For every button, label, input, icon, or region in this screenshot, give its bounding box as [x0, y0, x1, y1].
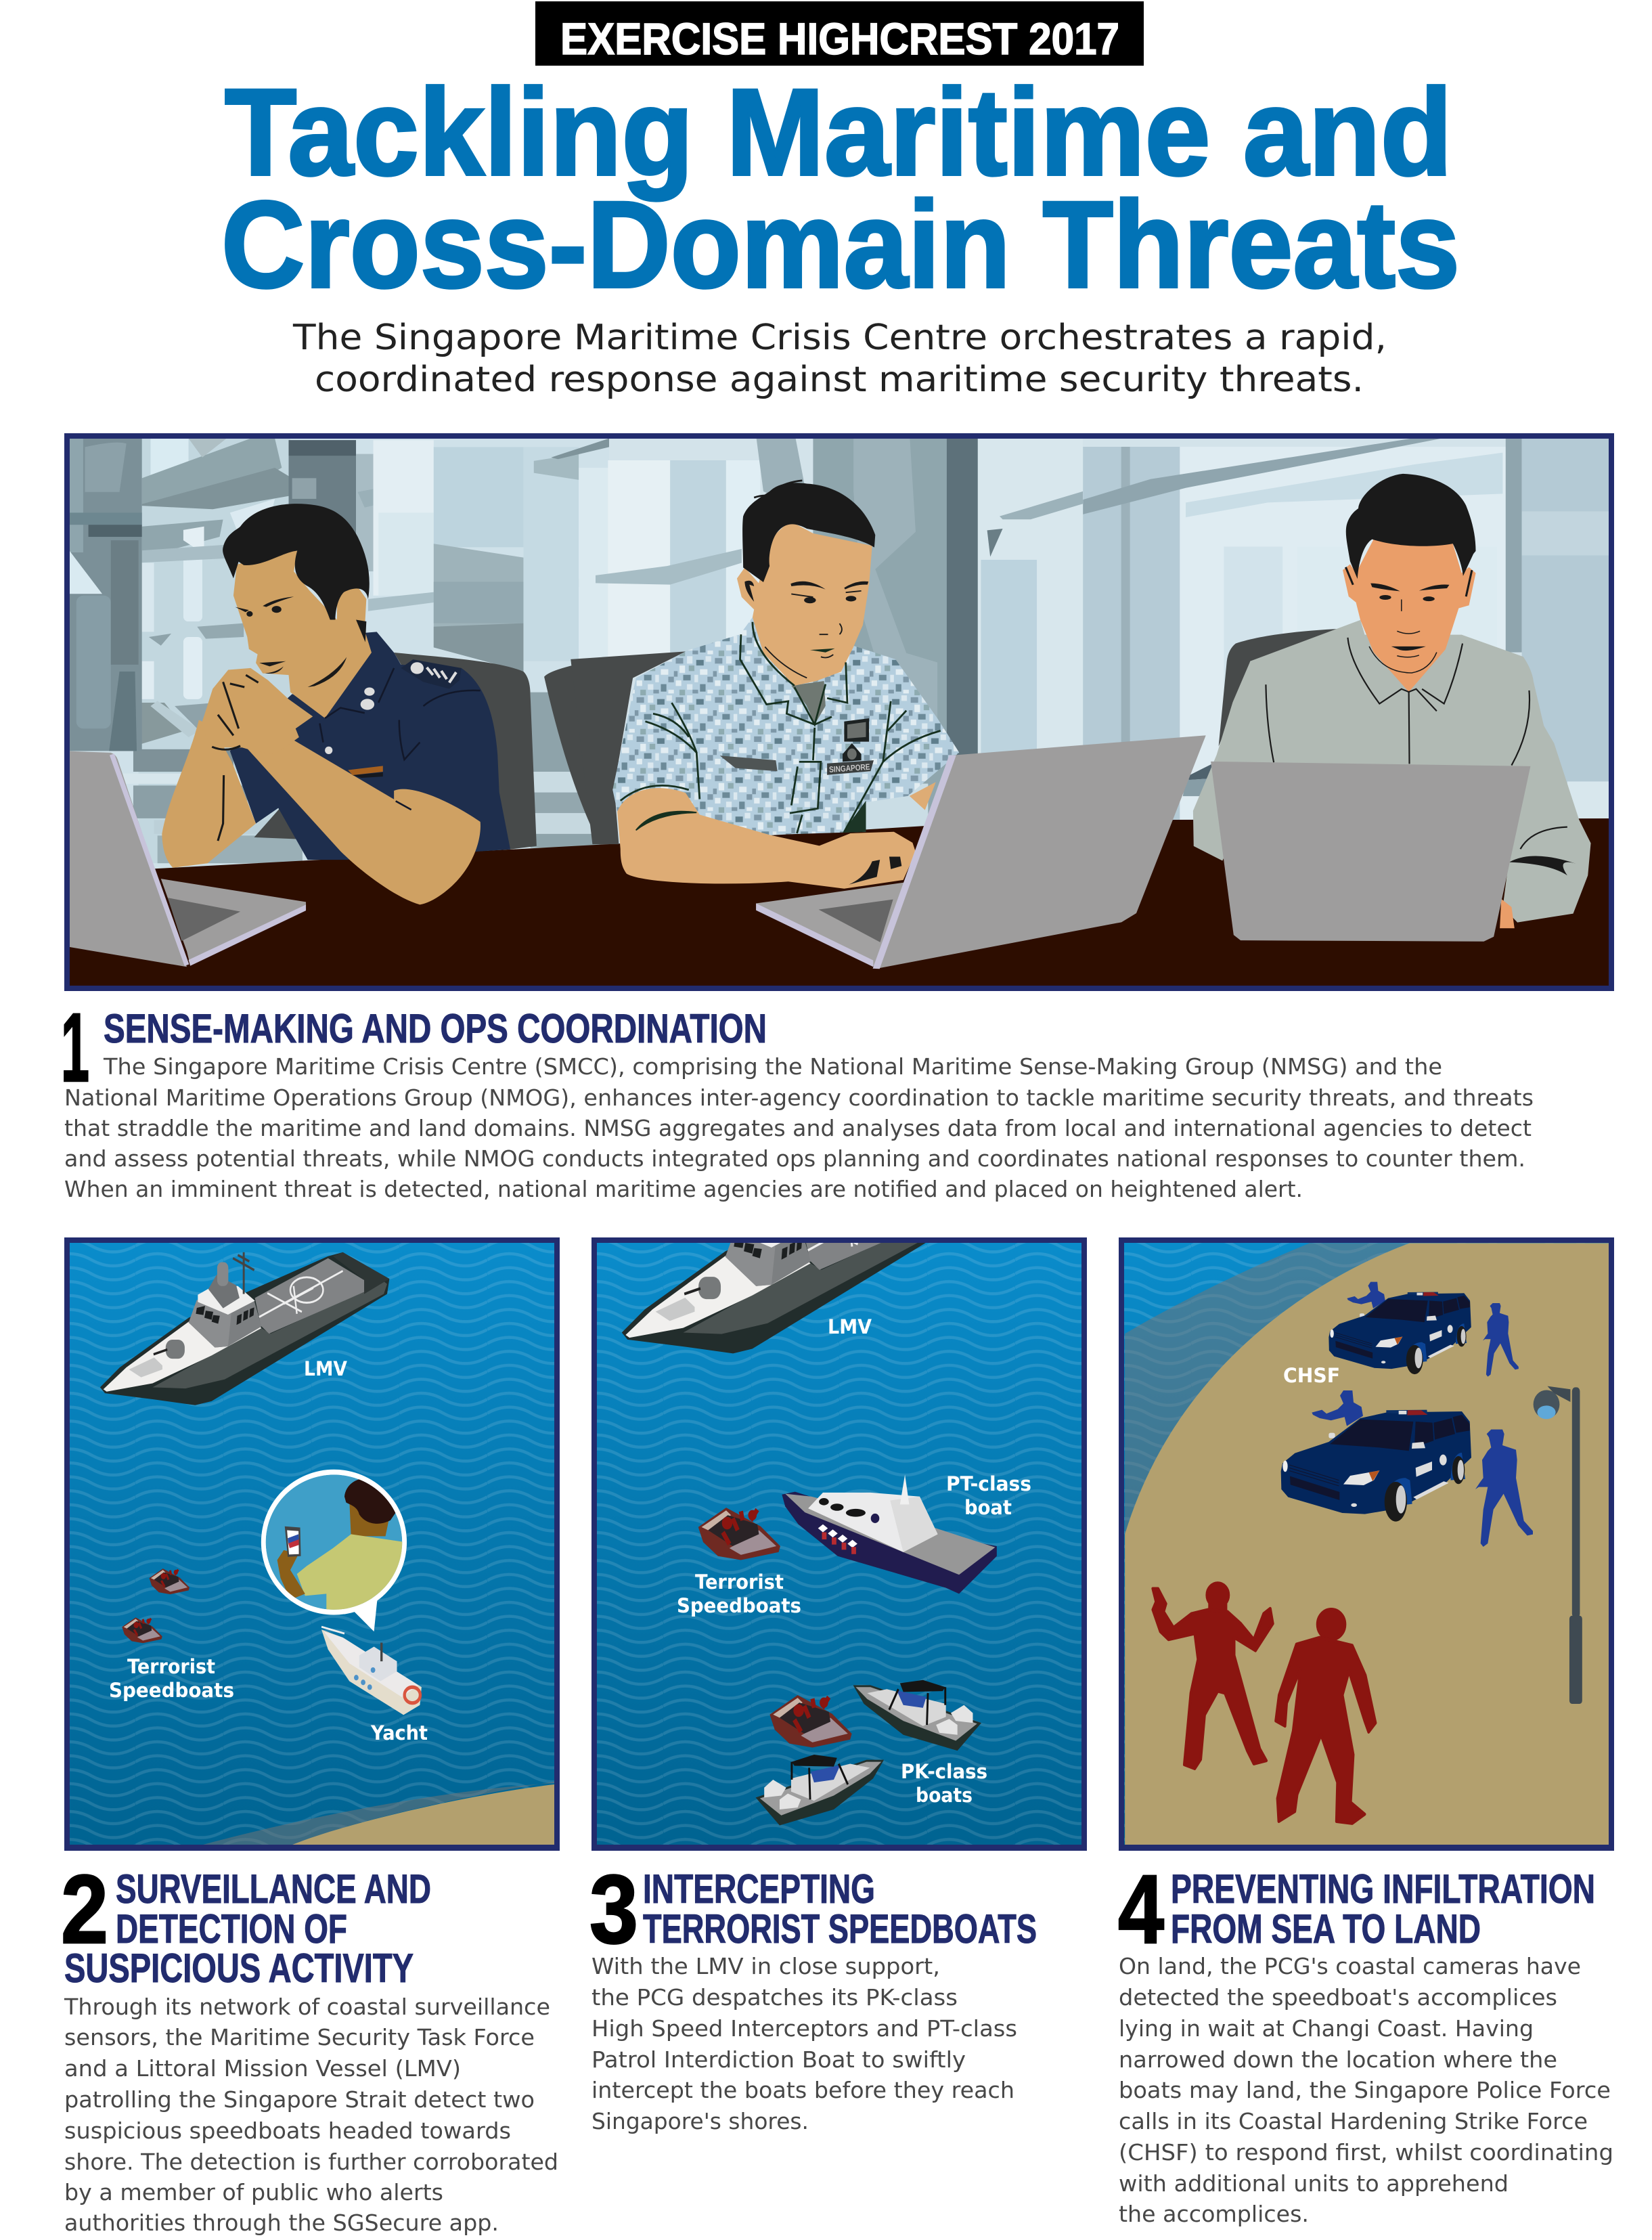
section 2 heading: SURVEILLANCE AND	[116, 1866, 431, 1912]
section 3 heading	[589, 1855, 1037, 1964]
chairs	[544, 651, 686, 844]
panel 2: surveillance scene	[64, 1237, 560, 1851]
shoreline and sand	[1125, 1243, 1611, 1850]
labels: interception scene	[677, 1315, 1031, 1807]
labels: interception scene: LMV	[828, 1315, 872, 1338]
callout: member of public with phone	[261, 1470, 407, 1631]
section 1 text: The Singapore Maritime Crisis Centre (SMCC), comprising the National Maritime Sense-Making Group (NMSG) and the	[103, 1053, 1442, 1080]
laptops	[64, 735, 1530, 969]
icon: PK-class boats	[756, 1680, 981, 1825]
labels: interception scene: boat	[964, 1496, 1012, 1519]
title: Tackling Maritime and	[225, 63, 1452, 201]
background: operations room windows	[70, 439, 1609, 869]
section 3 heading: INTERCEPTING	[643, 1866, 875, 1912]
section 1 text	[64, 1053, 1534, 1202]
section 2 heading: SUSPICIOUS ACTIVITY	[64, 1946, 414, 1991]
labels: surveillance scene: Terrorist	[127, 1655, 215, 1678]
labels: surveillance scene: LMV	[304, 1357, 348, 1380]
subtitle	[292, 317, 1387, 400]
section 1 heading	[61, 993, 767, 1102]
section 1 text: When an imminent threat is detected, national maritime agencies are notified and placed on heightened alert.	[64, 1176, 1303, 1202]
section 3 text: intercept the boats before they reach	[591, 2077, 1014, 2103]
section 4 text: with additional units to apprehend	[1119, 2170, 1509, 2197]
section 3 heading: TERRORIST SPEEDBOATS	[643, 1906, 1037, 1952]
icon: accomplices silhouettes	[1153, 1583, 1375, 1824]
section 1 text: that straddle the maritime and land domains. NMSG aggregates and analyses data from local and international agencies to detect	[64, 1115, 1532, 1141]
section 1 heading: SENSE-MAKING AND OPS COORDINATION	[104, 1006, 767, 1051]
labels: surveillance scene: Speedboats	[109, 1679, 234, 1702]
panel 3: interception scene	[591, 1174, 1087, 1851]
icon: LMV ship	[100, 1252, 389, 1405]
section 1 text: National Maritime Operations Group (NMOG), enhances inter-agency coordination to tackle maritime security threats, and threats	[64, 1084, 1534, 1111]
section 3 text: With the LMV in close support,	[591, 1953, 940, 1979]
section 3 text: High Speed Interceptors and PT-class	[591, 2015, 1017, 2042]
section 2 text: by a member of public who alerts	[64, 2179, 443, 2205]
section 3 heading: 3	[589, 1855, 638, 1964]
labels: interception scene: PT-class	[946, 1472, 1031, 1495]
section 2 text: patrolling the Singapore Strait detect two	[64, 2086, 535, 2113]
section 2 heading: DETECTION OF	[116, 1906, 347, 1952]
section 2 text: authorities through the SGSecure app.	[64, 2210, 499, 2236]
section 4 text: lying in wait at Changi Coast. Having	[1119, 2015, 1534, 2042]
label: CHSF: CHSF	[1283, 1364, 1340, 1387]
labels: surveillance scene	[109, 1357, 428, 1744]
section 4 text: detected the speedboat's accomplices	[1119, 1984, 1557, 2011]
icon: coastal camera on pole	[1534, 1386, 1582, 1704]
section 2 heading	[61, 1855, 431, 1991]
section 4 heading	[1118, 1855, 1595, 1964]
subtitle: coordinated response against maritime security threats.	[315, 359, 1364, 400]
section 2 text: shore. The detection is further corroborated	[64, 2149, 558, 2175]
section 3 text: Singapore's shores.	[591, 2108, 809, 2134]
labels: interception scene: Terrorist	[695, 1571, 784, 1594]
section 3 text: Patrol Interdiction Boat to swiftly	[591, 2046, 966, 2073]
labels: surveillance scene: Yacht	[370, 1721, 428, 1744]
section 4 text: (CHSF) to respond first, whilst coordinating	[1119, 2139, 1613, 2166]
person 1: navy officer	[162, 504, 537, 904]
section 4 text: narrowed down the location where the	[1119, 2046, 1557, 2073]
section 3 text: the PCG despatches its PK-class	[591, 1984, 958, 2011]
section 4 text: boats may land, the Singapore Police Force	[1119, 2077, 1611, 2103]
table	[70, 818, 1611, 988]
section 2 text: and a Littoral Mission Vessel (LMV)	[64, 2055, 461, 2082]
section 2 text	[64, 1994, 558, 2236]
banner: exercise highcrest 2017: EXERCISE HIGHCREST 2017	[560, 14, 1119, 64]
labels: interception scene: boats	[916, 1784, 973, 1807]
section 1 heading: 1	[61, 993, 89, 1102]
icon: yacht	[321, 1627, 422, 1715]
subtitle: The Singapore Maritime Crisis Centre orchestrates a rapid,	[292, 317, 1387, 358]
person 2: army officer: SINGAPORE	[829, 762, 870, 774]
section 4 heading: FROM SEA TO LAND	[1171, 1906, 1481, 1952]
icon: PT-class boat	[782, 1474, 997, 1594]
icon: terrorist speedboats	[698, 1508, 852, 1747]
section 4 text: the accomplices.	[1119, 2201, 1309, 2227]
icon: terrorist speedboats	[122, 1568, 189, 1643]
panel 4: coastal land scene	[1119, 1237, 1614, 1851]
section 4 text: calls in its Coastal Hardening Strike Force	[1119, 2108, 1588, 2134]
section 2 text: Through its network of coastal surveillance	[64, 1994, 550, 2020]
labels: interception scene: PK-class	[901, 1760, 987, 1783]
person 2: army officer	[612, 481, 959, 889]
section 4 text: On land, the PCG's coastal cameras have	[1119, 1953, 1581, 1979]
section 4 text	[1119, 1953, 1613, 2227]
section 4 heading: 4	[1118, 1855, 1164, 1964]
section 3 text	[591, 1953, 1017, 2134]
title: Cross-Domain Threats	[221, 175, 1460, 313]
person 3: civilian officer	[1193, 474, 1591, 928]
section 1 text: and assess potential threats, while NMOG conducts integrated ops planning and coordinates national responses to counter them.	[64, 1145, 1525, 1172]
icon: police cars	[1281, 1282, 1471, 1522]
labels: interception scene: Speedboats	[677, 1594, 801, 1617]
panel: hero illustration of three officers	[64, 433, 1617, 991]
section 2 text: sensors, the Maritime Security Task Force	[64, 2024, 535, 2050]
section 2 heading: 2	[61, 1855, 108, 1964]
title	[221, 63, 1460, 313]
icon: police officers	[1475, 1303, 1533, 1547]
icon: LMV ship, bow view	[621, 1243, 926, 1354]
section 2 text: suspicious speedboats headed towards	[64, 2117, 511, 2144]
